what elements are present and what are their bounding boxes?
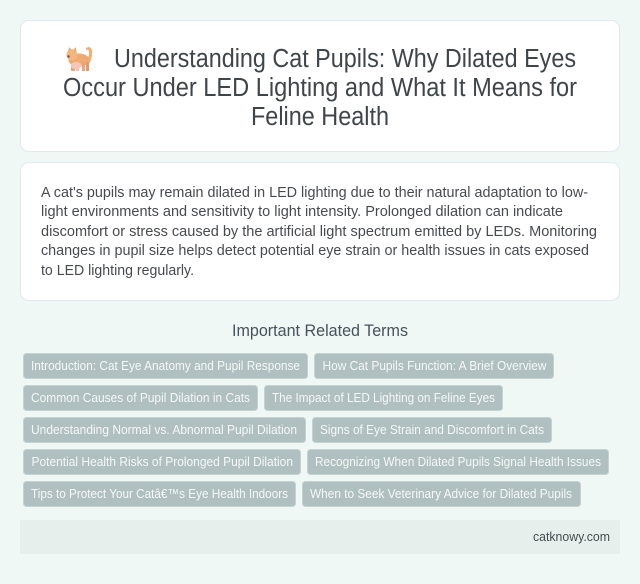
chip: protection tips: Tips to Protect Your Catâ€™s Eye Health Indoors [31, 486, 288, 501]
summary text [41, 184, 597, 279]
summary text: changes in pupil size helps detect potential eye strain or health issues in cats exposed [41, 242, 589, 259]
summary text: to LED lighting regularly. [41, 262, 194, 279]
title text: Feline Health [251, 103, 389, 131]
title text: Occur Under LED Lighting and What It Means for [63, 74, 577, 102]
chip: normal vs abnormal: Understanding Normal vs. Abnormal Pupil Dilation [31, 422, 297, 437]
summary text: light environments and sensitivity to light intensity. Prolonged dilation can indicate [41, 203, 563, 220]
chip: veterinary advice: When to Seek Veterinary Advice for Dilated Pupils [310, 486, 572, 501]
chip: protection tips [24, 482, 296, 506]
icon: cat [66, 47, 92, 71]
panel: summary card [20, 162, 620, 300]
chip: impact of LED: The Impact of LED Lighting on Feline Eyes [272, 390, 495, 405]
chip: common causes [24, 386, 258, 410]
chip: health risks: Potential Health Risks of Prolonged Pupil Dilation [32, 454, 293, 469]
footer: catknowy.com [533, 529, 610, 544]
chip: health risks [24, 450, 300, 474]
chip: how pupils function: How Cat Pupils Function: A Brief Overview [322, 358, 547, 373]
panel: title card [20, 20, 620, 152]
chip: recognizing signals [308, 450, 608, 474]
panel: related term chips [24, 354, 608, 506]
chip: common causes: Common Causes of Pupil Dilation in Cats [31, 390, 250, 405]
heading: important related terms: Important Related Terms [232, 322, 408, 340]
chip: how pupils function [314, 354, 554, 378]
chip: normal vs abnormal [24, 418, 306, 442]
chip: signs of eye strain [312, 418, 552, 442]
chip: recognizing signals: Recognizing When Dilated Pupils Signal Health Issues [315, 454, 601, 469]
chip: impact of LED [264, 386, 502, 410]
title text [63, 45, 577, 131]
chip: introduction: Introduction: Cat Eye Anatomy and Pupil Response [31, 358, 300, 373]
summary text: discomfort or stress caused by the artificial light spectrum emitted by LEDs. Monitoring [41, 223, 597, 240]
chip: veterinary advice [302, 482, 580, 506]
chip: introduction [24, 354, 308, 378]
summary text: A cat's pupils may remain dilated in LED lighting due to their natural adaptation to low- [41, 184, 588, 201]
footer [20, 520, 620, 554]
title text: Understanding Cat Pupils: Why Dilated Eyes [114, 45, 576, 73]
chip: signs of eye strain: Signs of Eye Strain and Discomfort in Cats [320, 422, 544, 437]
